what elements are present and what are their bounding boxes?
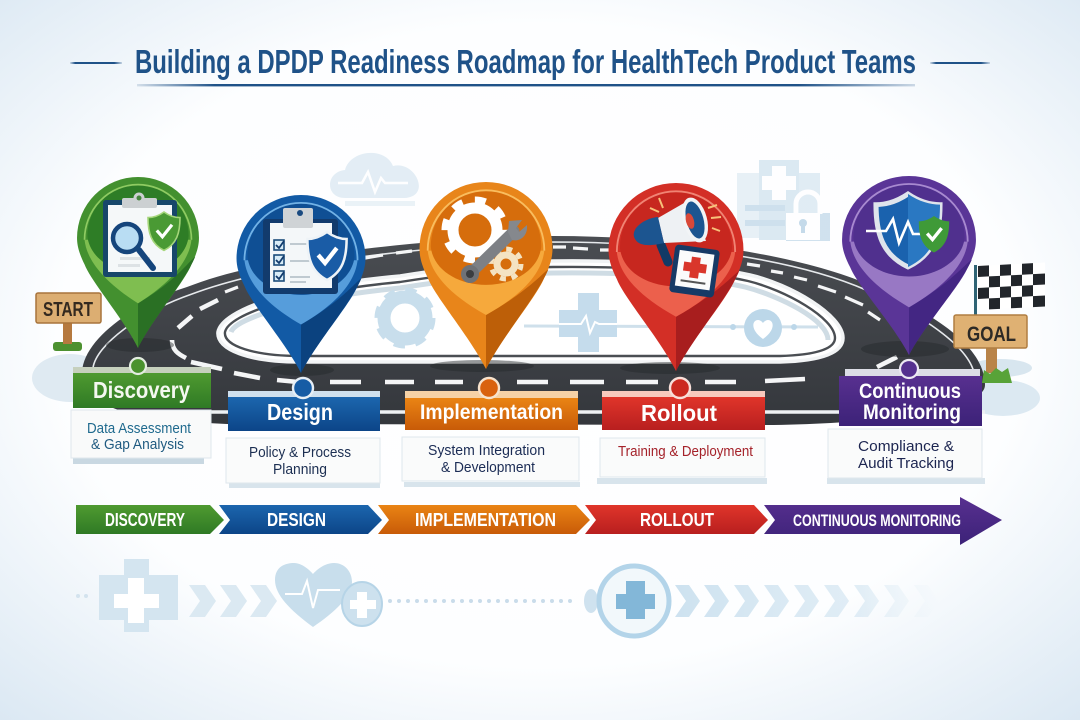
marker dot: rollout [670, 378, 690, 398]
card: design: Planning [273, 461, 327, 478]
arrow: design: DESIGN [267, 510, 326, 530]
card: discovery: Data Assessment [87, 420, 192, 437]
card: continuous monitoring: Monitoring [863, 401, 961, 424]
card: implementation: System Integration [428, 442, 545, 459]
card: rollout: Training & Deployment [618, 443, 754, 460]
arrow: implementation [378, 505, 590, 534]
faded icon: hospital and lock [737, 160, 830, 241]
faded footer: medical cross [99, 559, 178, 632]
card: continuous monitoring [827, 360, 985, 484]
card: continuous monitoring: Continuous [859, 380, 961, 403]
card: rollout [597, 378, 767, 484]
arrow: design [219, 505, 382, 534]
left ground blob [32, 354, 108, 402]
card: discovery [71, 358, 211, 464]
card: design: Policy & Process [249, 444, 351, 461]
card: discovery: Discovery [93, 377, 190, 403]
goal sign with checkered flag: GOAL [967, 323, 1016, 346]
icon: gears and wrench [445, 200, 527, 283]
arrow: continuous monitoring: CONTINUOUS MONITORING [793, 511, 961, 530]
card: implementation: & Development [441, 459, 536, 476]
pin: design [237, 195, 365, 373]
pin shadows on road [106, 338, 949, 376]
icon: megaphone and tablet [634, 195, 721, 298]
icon: clipboard with magnifier and shield [103, 192, 180, 277]
pin: rollout [609, 183, 743, 371]
marker dot: implementation [479, 378, 499, 398]
marker dot: design [293, 378, 313, 398]
card: continuous monitoring: Compliance & [858, 438, 954, 455]
start sign: START [43, 299, 93, 321]
faded line with medical cross and heart [524, 293, 818, 352]
road infield [218, 261, 843, 362]
faded footer: chevrons right [675, 585, 939, 617]
icon: checklist with shield [263, 208, 347, 294]
pin: implementation [420, 182, 552, 369]
arrow: discovery [76, 505, 224, 534]
faded icon: cloud with pulse [330, 153, 419, 206]
faded footer: heart with pulse [275, 563, 382, 627]
card: design: Design [267, 399, 333, 425]
pin: discovery [77, 177, 199, 348]
arrow: rollout [585, 505, 768, 534]
card: discovery: & Gap Analysis [91, 436, 184, 453]
arrow: discovery: DISCOVERY [105, 510, 185, 530]
start sign [36, 293, 101, 351]
road [82, 236, 985, 425]
card: design [226, 378, 380, 488]
process arrow bar [76, 497, 1002, 545]
arrow: continuous monitoring [764, 497, 1002, 545]
marker dot: discovery [130, 358, 146, 374]
goal sign with checkered flag [954, 262, 1045, 383]
card: implementation: Implementation [420, 401, 563, 424]
card: continuous monitoring: Audit Tracking [858, 455, 954, 472]
faded footer: dotted line [390, 599, 578, 603]
arrow: implementation: IMPLEMENTATION [415, 510, 556, 530]
marker dot: continuous monitoring [900, 360, 918, 378]
icon: shield with pulse and check [866, 194, 949, 267]
card: rollout: Rollout [641, 400, 717, 426]
faded footer: small dots left [78, 594, 94, 598]
arrow: rollout: ROLLOUT [640, 510, 714, 530]
faded footer: circle with cross [584, 566, 669, 636]
faded footer: chevrons left [189, 585, 277, 617]
pin: continuous monitoring [842, 176, 976, 355]
right ground blob [966, 359, 1040, 416]
card: implementation [402, 378, 580, 487]
faded icon: gear [378, 291, 432, 345]
